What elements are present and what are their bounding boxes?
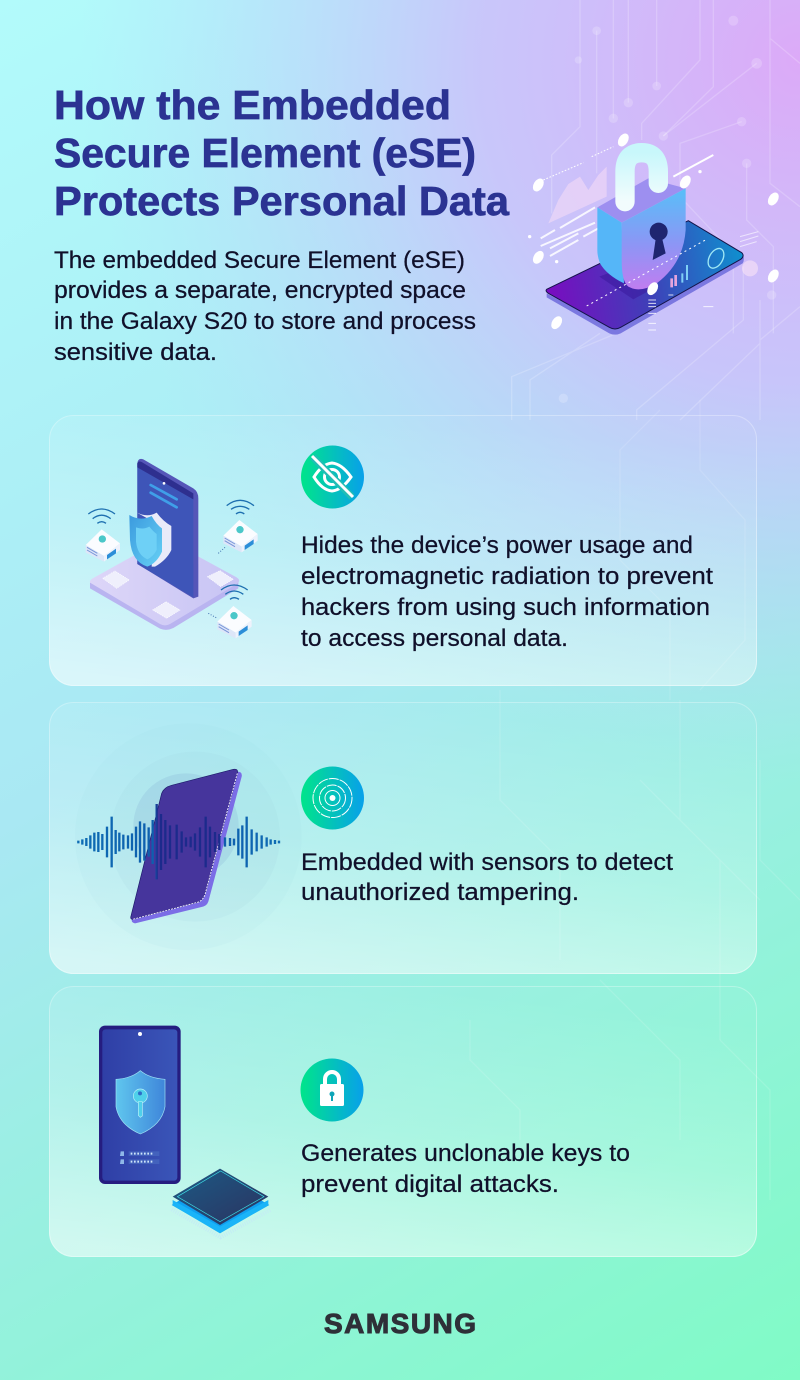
panel text [301, 1140, 630, 1198]
panel text: to access personal data. [301, 625, 568, 652]
panel text: Hides the device’s power usage and [301, 532, 693, 559]
illustration: phone with sound wave [75, 723, 302, 950]
intro text: provides a separate, encrypted space [54, 277, 466, 304]
icon: padlock [300, 1058, 364, 1122]
illustration: phone with key shield and chip [99, 1026, 271, 1237]
panel text: unauthorized tampering. [301, 879, 579, 906]
title: Secure Element (eSE) [54, 130, 476, 176]
illustration: phone with shield and modules [86, 459, 258, 638]
panel text: prevent digital attacks. [301, 1171, 559, 1198]
intro text: in the Galaxy S20 to store and process [54, 308, 476, 335]
icon: concentric rings [301, 766, 364, 830]
panel: unclonable keys [50, 986, 756, 1256]
intro text: The embedded Secure Element (eSE) [54, 247, 465, 274]
Samsung logo: SAMSUNG [324, 1308, 476, 1339]
panel text: Generates unclonable keys to [301, 1140, 630, 1167]
icon: crossed-out eye [301, 446, 364, 508]
intro text: sensitive data. [54, 339, 217, 366]
title [54, 82, 510, 224]
panel text [301, 532, 713, 652]
illustration: padlock on phone [528, 132, 781, 335]
panel text: electromagnetic radiation to prevent [301, 563, 713, 590]
panel: power and radiation [50, 416, 756, 686]
panel text: hackers from using such information [301, 594, 710, 621]
panel text: Embedded with sensors to detect [301, 849, 673, 876]
title: Protects Personal Data [54, 178, 510, 224]
intro text [54, 247, 476, 366]
panel: tamper sensors [50, 702, 756, 974]
title: How the Embedded [54, 82, 451, 128]
panel text [301, 849, 673, 906]
